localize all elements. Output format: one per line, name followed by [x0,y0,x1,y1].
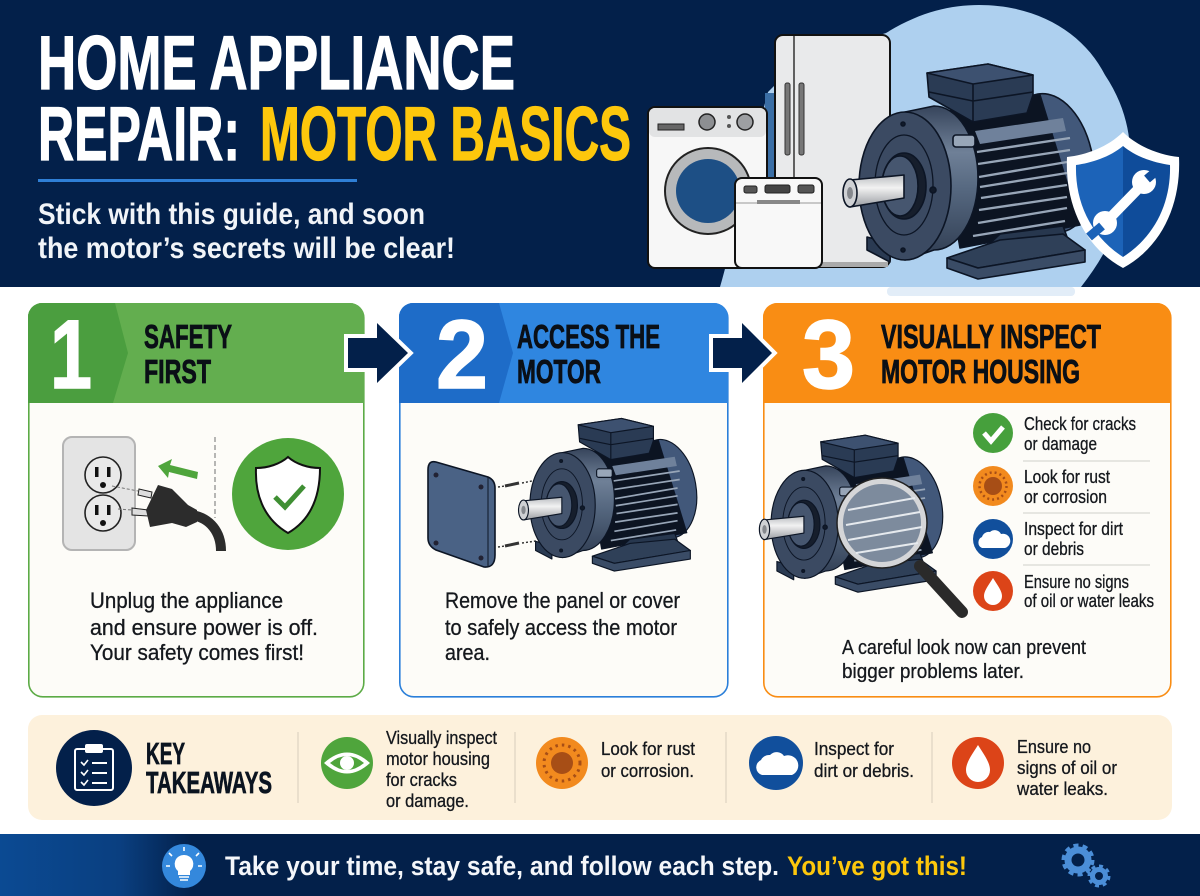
step 2 heading: MOTOR [517,353,601,390]
icon: gears [1064,846,1109,886]
title [38,21,631,177]
takeaway: inspect housing [386,728,497,811]
step 3 header [763,303,1171,403]
icon: water drop [952,737,1004,789]
takeaway: leaks [1016,737,1117,799]
icon: motor under magnifier [759,435,962,612]
icon: light bulb [162,844,206,888]
takeaway: inspect housing: motor housing [386,749,490,769]
icon: removed cover panel [428,462,495,567]
icon: water drop [973,571,1013,611]
dashed separator [214,437,216,518]
icon: screws [498,481,536,547]
subtitle [38,198,455,265]
step 3 heading: MOTOR HOUSING [881,353,1080,390]
checklist: or debris [1024,539,1084,559]
step 2 header [399,303,728,403]
takeaway: rust: Look for rust [601,739,695,759]
takeaways heading [146,736,272,800]
step 1 heading: FIRST [144,353,211,390]
takeaway: leaks: signs of oil or [1017,758,1117,778]
panel: step 1 safety first [28,300,364,697]
step 1 heading: SAFETY [144,318,232,355]
icon: dirt cloud [749,736,803,790]
checklist: Inspect for dirt [1024,519,1123,539]
takeaway: dirt: Inspect for [814,739,894,759]
header band [0,0,1200,287]
title: REPAIR: [38,92,240,177]
step 1 text [90,588,318,665]
icon: eye [321,737,373,789]
icon: motor [519,418,704,571]
checklist: of oil or water leaks [1024,591,1154,611]
step 3 text: A careful look now can prevent [842,637,1086,659]
step 1 text: Unplug the appliance [90,588,283,613]
checklist: Ensure no signs [1024,572,1129,592]
arrow: step 1 to 2 [348,323,408,383]
footer message: Take your time, stay safe, and follow each step. [225,851,779,881]
title underline [38,179,357,182]
step 3 text: bigger problems later. [842,661,1024,683]
takeaway: leaks: water leaks. [1016,779,1108,799]
icon: washing machine [648,107,767,268]
takeaway: inspect housing: or damage. [386,791,469,811]
step 3 heading: VISUALLY INSPECT [881,318,1101,355]
subtitle: the motor’s secrets will be clear! [38,232,455,265]
step 2 heading [517,318,660,390]
step 3 text [842,637,1086,683]
step 1 text: Your safety comes first! [90,640,304,665]
footer band [0,834,1200,896]
step 1 heading [144,318,232,390]
icon: dirt cloud [973,519,1013,559]
step 1 number [28,300,128,409]
step 2 number: 2 [436,300,488,409]
takeaways heading: KEY [146,736,185,771]
icon: clipboard [56,730,132,806]
icon: electric motor [843,64,1105,279]
subtitle: Stick with this guide, and soon [38,198,425,231]
icon: dishwasher [735,178,822,268]
step 1 number: 1 [50,300,92,409]
icon: green shield check [232,438,344,550]
hero backdrop circle [720,5,1130,296]
step 2 heading: ACCESS THE [517,318,660,355]
takeaway: rust [601,739,695,781]
checklist: Check for cracks [1024,414,1136,434]
panel: step 2 access the motor [399,300,728,697]
checklist: or damage [1024,434,1097,454]
takeaway: inspect housing: for cracks [386,770,457,790]
title: MOTOR BASICS [260,92,631,177]
step 2 text: area. [445,640,490,665]
checklist: or corrosion [1024,487,1107,507]
panel: key takeaways [28,715,1172,820]
takeaway: dirt: dirt or debris. [814,761,914,781]
takeaway: inspect housing: Visually inspect [386,728,497,748]
footer message: You’ve got this! [787,851,967,881]
icon: refrigerator [775,35,890,267]
title: HOME APPLIANCE [38,21,515,106]
takeaways heading: TAKEAWAYS [146,765,272,800]
takeaway: leaks: Ensure no [1017,737,1091,757]
step 2 text: Remove the panel or cover [445,588,680,613]
takeaway: dirt [814,739,914,781]
icon: rust [973,466,1013,506]
step 1 text: and ensure power is off. [90,615,318,640]
step 1 header [28,303,364,403]
panel: step 3 visually inspect [759,300,1171,697]
arrow: step 2 to 3 [713,323,772,383]
checklist [973,413,1154,611]
step 3 number: 3 [802,300,855,409]
step 3 heading [881,318,1101,390]
step 2 number [399,300,513,409]
icon: wall outlet and plug [63,437,221,551]
takeaway: rust: or corrosion. [601,761,694,781]
icon: rust [536,737,588,789]
checklist: Look for rust [1024,467,1110,487]
icon: check [973,413,1013,453]
step 2 text [445,588,680,665]
icon: shield with wrench [1067,132,1179,268]
step 2 text: to safely access the motor [445,615,677,640]
arrow: unplug direction [158,459,198,479]
